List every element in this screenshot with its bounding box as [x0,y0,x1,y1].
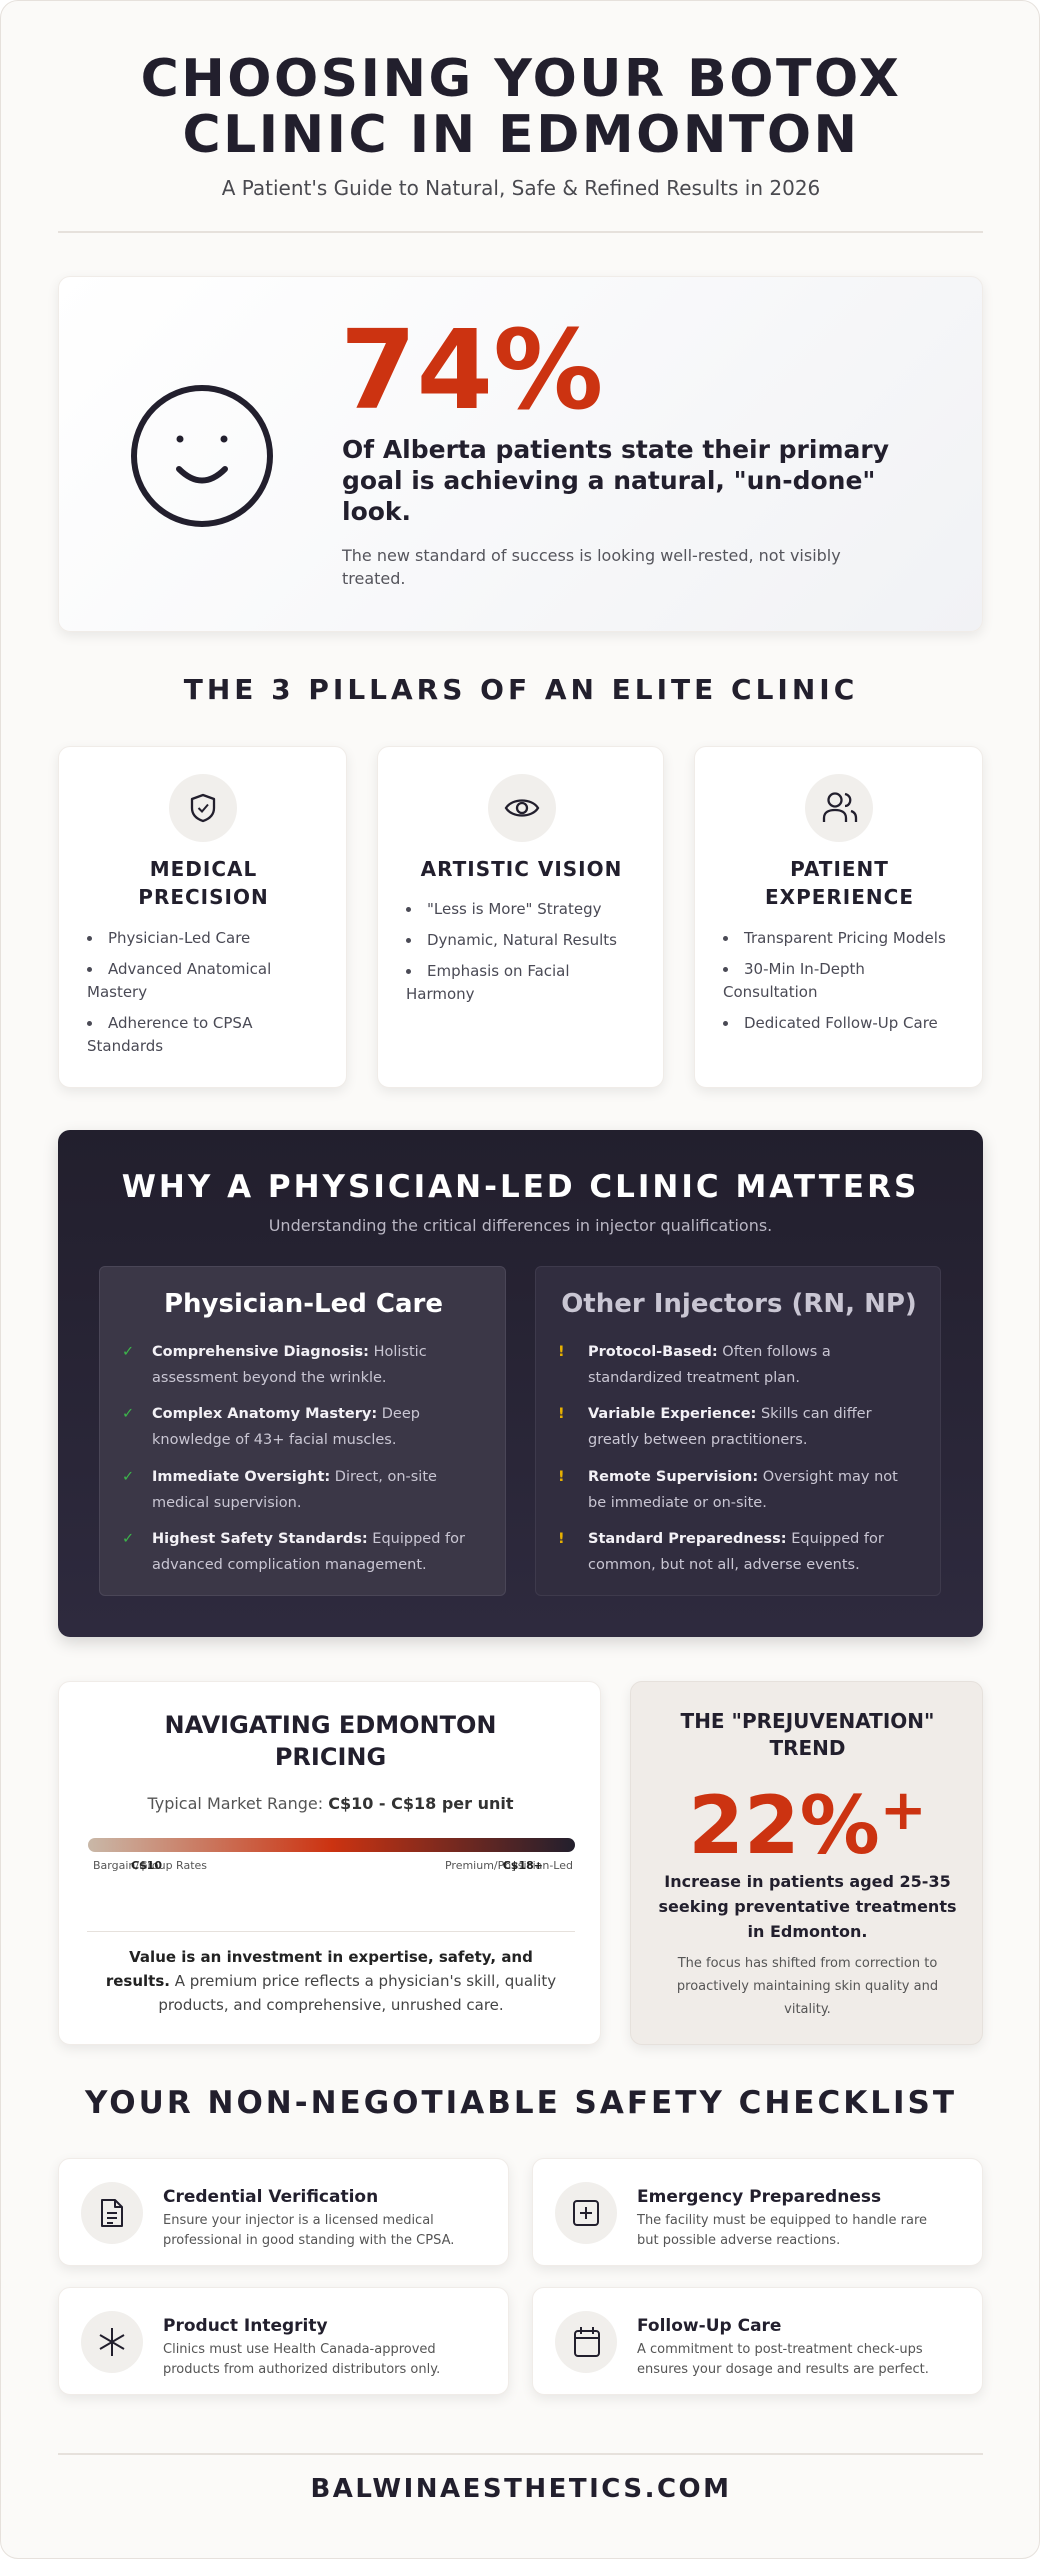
icon: medical kit [555,2182,617,2244]
footer: BALWINAESTHETICS.COM [310,2474,732,2504]
trend heading: TREND [769,1736,846,1760]
icon: calendar [555,2311,617,2373]
panel: physician-led comparison [58,1130,983,1637]
box: physician-led care: ✓ [122,1469,134,1485]
box: other injectors: ! [558,1531,565,1547]
box: other injectors: Protocol-Based: Often follows a standardized treatment plan. [588,1344,831,1386]
bar labels: C$10 [131,1859,162,1872]
pillar title: PATIENT [790,857,889,881]
big stat: 22%+ [688,1778,927,1872]
pillar list: "Less is More" Strategy [427,900,602,918]
checklist: emergency preparedness: The facility must be equipped to handle rare but possible adverse reactions. [637,2213,927,2248]
panel heading: WHY A PHYSICIAN-LED CLINIC MATTERS [122,1169,919,1205]
box: physician-led care: Highest Safety Standards: Equipped for advanced complication management. [152,1531,465,1573]
bar labels: Bargain/Group Rates [93,1859,207,1872]
pillar list: 30-Min In-Depth Consultation [723,960,865,1001]
pricing heading: NAVIGATING EDMONTON [165,1711,496,1739]
pillar list: Advanced Anatomical Mastery [87,960,271,1001]
icon: asterisk [81,2311,143,2373]
icon: shield [169,774,237,842]
pillar title: EXPERIENCE [765,885,914,909]
subtitle: A Patient's Guide to Natural, Safe & Refined Results in 2026 [222,176,820,200]
trend description: Increase in patients aged 25-35 seeking preventative treatments in Edmonton. [658,1872,956,1941]
value text: Value is an investment in expertise, safety, and results. A premium price reflects a physician's skill, quality products, and comprehensive, unrushed care. [106,1948,556,2014]
title: CLINIC IN EDMONTON [182,105,860,165]
pillar list: Adherence to CPSA Standards [87,1014,252,1055]
pillar list [87,929,271,1055]
pillar: medical precision [58,746,347,1088]
pillar: artistic vision [377,746,664,1088]
box: other injectors: ! [558,1469,565,1485]
checklist: product integrity [58,2287,509,2395]
box: other injectors: Variable Experience: Skills can differ greatly between practitioners. [588,1406,872,1448]
gradient price bar [88,1838,575,1852]
icon: users [805,774,873,842]
pillar title [138,857,269,909]
pillar list: Transparent Pricing Models [744,929,946,947]
checklist: product integrity: Clinics must use Health Canada-approved products from authorized distributors only. [163,2342,440,2377]
box: physician-led care: ✓ [122,1344,134,1360]
box: physician-led care [99,1266,506,1596]
pillar title [765,857,914,909]
pillar title: MEDICAL [150,857,257,881]
checklist: product integrity: Product Integrity [163,2316,328,2336]
comparison items [122,1344,465,1573]
pillar list [723,929,946,1032]
pillar list: Dynamic, Natural Results [427,931,617,949]
box: physician-led care: ✓ [122,1406,134,1422]
checklist: credential verification: Credential Verification [163,2187,378,2207]
bar labels: C$18+ [503,1859,543,1872]
pricing heading: PRICING [275,1743,386,1771]
box: physician-led care: Immediate Oversight: Direct, on-site medical supervision. [152,1469,437,1511]
stat description: Of Alberta patients state their primary goal is achieving a natural, "un-done" look. [342,435,889,526]
title: CHOOSING YOUR BOTOX [141,49,901,109]
price range: Typical Market Range: C$10 - C$18 per unit [147,1794,514,1813]
box title: Physician-Led Care [164,1289,443,1319]
stat note: The new standard of success is looking well-rested, not visibly treated. [342,546,841,588]
trend heading [680,1709,934,1760]
box: physician-led care: ✓ [122,1531,134,1547]
checklist: emergency preparedness [532,2158,983,2266]
panel: prejuvenation trend [630,1681,983,2045]
box title: Other Injectors (RN, NP) [561,1289,917,1319]
box: physician-led care: Comprehensive Diagnosis: Holistic assessment beyond the wrinkle. [152,1344,427,1386]
heading: safety checklist: YOUR NON-NEGOTIABLE SAFETY CHECKLIST [85,2085,957,2121]
pillar title: PRECISION [138,885,269,909]
pillar list: Dedicated Follow-Up Care [744,1014,938,1032]
checklist: follow-up care [532,2287,983,2395]
big stat: 74% [340,306,603,434]
box: other injectors: Standard Preparedness: Equipped for common, but not all, adverse events. [588,1531,884,1573]
pricing heading [165,1711,496,1771]
pillar list: Physician-Led Care [108,929,250,947]
checklist: credential verification: Ensure your injector is a licensed medical professional in good standing with the CPSA. [163,2213,454,2248]
bar labels: Premium/Physician-Led [445,1859,573,1872]
trend heading: THE "PREJUVENATION" [681,1709,934,1733]
panel: pricing [58,1681,601,2045]
icon: smiley face [131,385,273,527]
icon: document [81,2182,143,2244]
box: physician-led care: Complex Anatomy Mastery: Deep knowledge of 43+ facial muscles. [152,1406,420,1448]
checklist: emergency preparedness: Emergency Preparedness [637,2187,881,2207]
comparison items [558,1344,898,1573]
pillar list [406,900,617,1003]
checklist: follow-up care: Follow-Up Care [637,2316,781,2336]
checklist: follow-up care: A commitment to post-treatment check-ups ensures your dosage and results are perfect. [637,2342,929,2377]
trend note: The focus has shifted from correction to proactively maintaining skin quality and vitality. [677,1956,938,2017]
pillar title: ARTISTIC VISION [421,857,622,881]
pillar: patient experience [694,746,983,1088]
heading: pillars: THE 3 PILLARS OF AN ELITE CLINIC [184,673,858,706]
box: other injectors: ! [558,1406,565,1422]
bar labels [93,1859,573,1872]
box: other injectors: ! [558,1344,565,1360]
stat card: 74% [58,276,983,632]
icon: eye [488,774,556,842]
panel subtitle: Understanding the critical differences in injector qualifications. [269,1216,772,1235]
box: other injectors [535,1266,941,1596]
title [141,49,901,165]
checklist: credential verification [58,2158,509,2266]
pillar list: Emphasis on Facial Harmony [406,962,570,1003]
box: other injectors: Remote Supervision: Oversight may not be immediate or on-site. [588,1469,898,1511]
